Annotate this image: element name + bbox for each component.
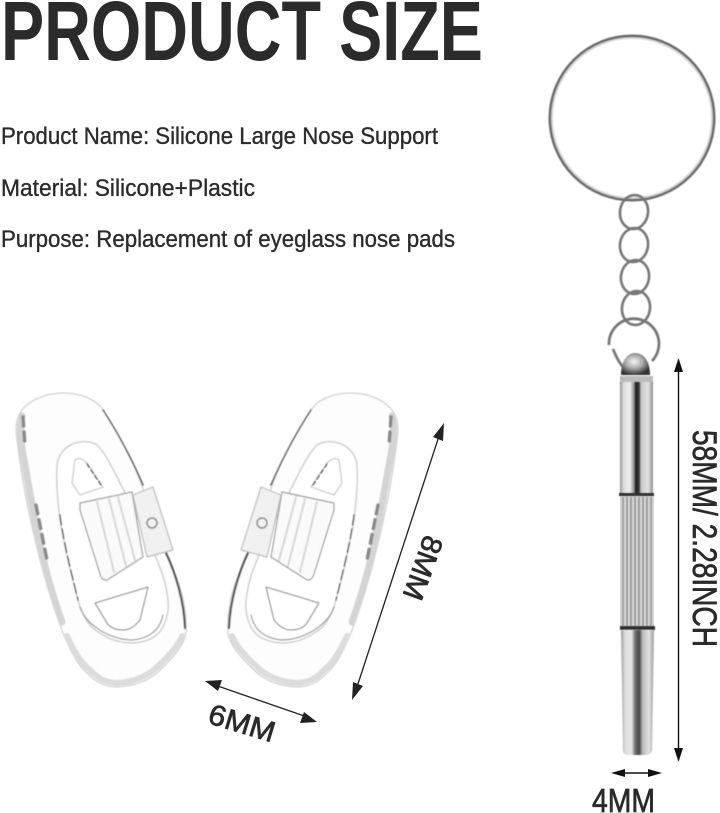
icon: left nose pad: [16, 393, 186, 687]
jump ring: [609, 319, 659, 361]
label: 6MM: 6MM: [205, 699, 279, 749]
icon: right nose pad: [228, 393, 398, 687]
icon: chain links: [609, 193, 659, 368]
material line: Material: Silicone+Plastic: [1, 175, 255, 202]
arrow: 8MM dimension: [352, 423, 444, 700]
icon: key ring: [550, 36, 714, 200]
text block: product details: [1, 123, 455, 253]
arrow: 58MM dimension: [674, 358, 683, 762]
purpose line: Purpose: Replacement of eyeglass nose pads: [1, 226, 455, 253]
arrow: 6MM dimension: [205, 680, 317, 723]
label: 8MM: 8MM: [396, 531, 448, 604]
icon: mini screwdriver: [619, 353, 655, 755]
arrow: 4MM dimension: [611, 769, 662, 777]
product name line: Product Name: Silicone Large Nose Support: [1, 123, 438, 150]
